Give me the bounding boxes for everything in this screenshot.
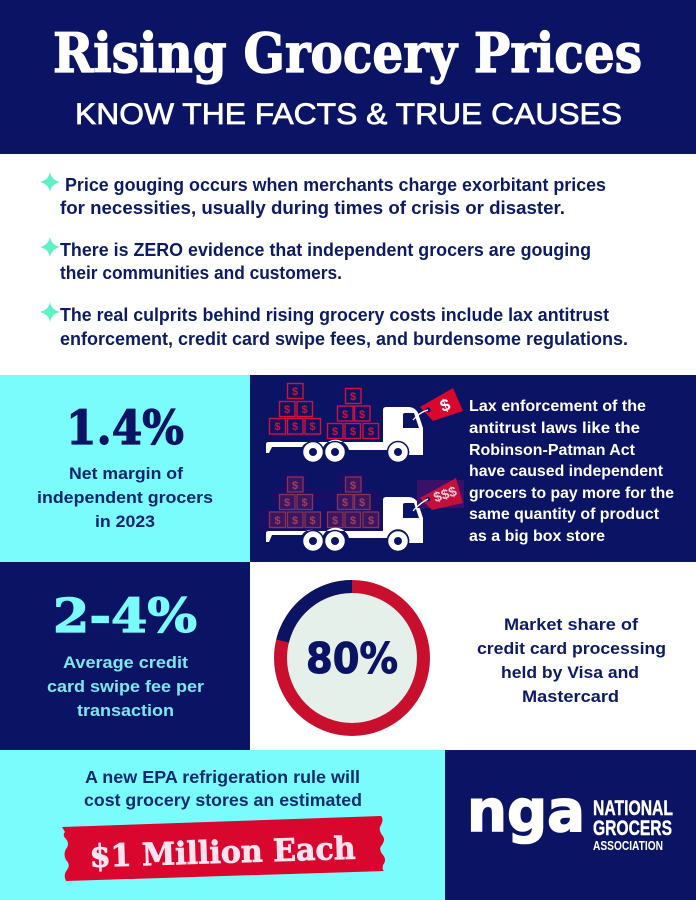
panel: NGA logo xyxy=(445,750,696,900)
truck: three dollar tag: $ xyxy=(332,515,338,527)
truck: one dollar tag: $ xyxy=(292,386,298,398)
truck body xyxy=(266,497,423,543)
bullet: price gouging: Price gouging occurs when merchants charge exorbitant prices xyxy=(65,175,606,195)
bullet: zero evidence: There is ZERO evidence that independent grocers are gouging xyxy=(60,240,591,260)
truck: three dollar tag: $ xyxy=(309,515,316,527)
icon: sparkle xyxy=(40,302,60,322)
truck: three dollar tag: $ xyxy=(359,497,365,509)
truck: one dollar tag: $ xyxy=(292,421,298,433)
truck: one dollar tag: $ xyxy=(350,391,356,403)
net margin caption: Net margin of xyxy=(69,464,183,483)
EPA text: A new EPA refrigeration rule will xyxy=(85,767,360,787)
subtitle: KNOW THE FACTS & TRUE CAUSES xyxy=(75,98,622,131)
truck: one dollar tag: $ xyxy=(342,409,348,421)
truck body xyxy=(266,407,423,455)
boxes of product xyxy=(270,384,378,438)
truck: three dollar tag: $ xyxy=(292,515,298,527)
panel: net margin xyxy=(0,375,250,562)
antitrust text: antitrust laws like the xyxy=(469,420,640,437)
truck: three dollar tag: $ xyxy=(284,497,290,509)
net margin caption: in 2023 xyxy=(95,512,155,531)
truck: one dollar tag: $ xyxy=(437,395,453,416)
bullet: real culprits: The real culprits behind rising grocery costs include lax antitrust xyxy=(60,305,609,325)
title: Rising Grocery Prices xyxy=(53,21,642,85)
haze behind boxes xyxy=(258,472,382,532)
stat: 1.4%: 1.4% xyxy=(66,401,184,456)
panel: swipe fee xyxy=(0,562,250,750)
bullet: price gouging xyxy=(60,175,606,218)
market share caption: Market share of xyxy=(504,615,638,634)
truck: three dollar tag xyxy=(258,472,464,552)
truck: one dollar tag: $ xyxy=(301,404,308,416)
antitrust text: as a big box store xyxy=(469,528,605,545)
panel: header xyxy=(0,0,696,154)
price tag xyxy=(420,388,463,421)
donut chart: 80% xyxy=(280,586,424,730)
market share caption: held by Visa and xyxy=(501,663,639,682)
truck: one dollar tag xyxy=(266,384,463,462)
icon: sparkle xyxy=(40,172,60,192)
antitrust text: Robinson-Patman Act xyxy=(469,442,635,459)
antitrust text xyxy=(469,398,674,545)
truck: one dollar tag: $ xyxy=(274,421,281,433)
antitrust text: Lax enforcement of the xyxy=(469,398,646,415)
logo name xyxy=(593,797,673,853)
donut chart: 80%: 80% xyxy=(306,634,398,683)
boxes of product xyxy=(270,477,378,528)
truck: one dollar tag: $ xyxy=(350,426,356,438)
EPA text: cost grocery stores an estimated xyxy=(84,790,362,810)
truck: one dollar tag: $ xyxy=(284,404,290,416)
truck: three dollar tag: $ xyxy=(350,515,356,527)
truck: one dollar tag: $ xyxy=(359,409,365,421)
truck: three dollar tag: $ xyxy=(368,515,374,527)
stat: 2-4%: 2-4% xyxy=(53,589,197,644)
panel: EPA rule xyxy=(0,750,445,900)
truck: three dollar tag: $ xyxy=(274,515,281,527)
EPA text xyxy=(84,767,362,810)
panel: market share xyxy=(250,562,696,750)
truck: three dollar tag: $$$ xyxy=(431,483,459,505)
antitrust text: same quantity of product xyxy=(469,506,659,523)
truck: one dollar tag: $ xyxy=(332,426,338,438)
logo wordmark: nga xyxy=(467,777,585,845)
truck: three dollar tag: $ xyxy=(301,497,308,509)
ribbon: $1 Million Each xyxy=(62,816,385,881)
panel: key facts xyxy=(40,172,628,349)
antitrust text: have caused independent xyxy=(469,463,663,480)
bullet: zero evidence: their communities and customers. xyxy=(60,263,342,283)
bullet: zero evidence xyxy=(60,240,591,283)
market share caption: credit card processing xyxy=(477,639,666,658)
logo name: ASSOCIATION xyxy=(593,839,663,853)
net margin caption: independent grocers xyxy=(37,488,213,507)
bullet: real culprits: enforcement, credit card swipe fees, and burdensome regulations. xyxy=(60,329,628,349)
bullet: real culprits xyxy=(60,305,628,349)
swipe fee caption: card swipe fee per xyxy=(47,677,204,696)
panel: antitrust enforcement xyxy=(250,375,696,562)
net margin caption xyxy=(37,464,213,531)
antitrust text: grocers to pay more for the xyxy=(469,485,674,502)
bullet: price gouging: for necessities, usually during times of crisis or disaster. xyxy=(60,198,565,218)
swipe fee caption xyxy=(47,653,204,720)
truck: three dollar tag: $ xyxy=(292,480,298,492)
truck: one dollar tag: $ xyxy=(368,426,374,438)
swipe fee caption: transaction xyxy=(77,701,174,720)
truck: three dollar tag: $ xyxy=(342,497,348,509)
icon: sparkle xyxy=(40,237,60,257)
swipe fee caption: Average credit xyxy=(63,653,188,672)
truck: one dollar tag: $ xyxy=(309,421,316,433)
market share caption xyxy=(477,615,666,706)
truck: three dollar tag: $ xyxy=(350,480,356,492)
ribbon: $1 Million Each: $1 Million Each xyxy=(89,831,356,875)
price tag xyxy=(417,480,464,508)
market share caption: Mastercard xyxy=(522,687,619,706)
